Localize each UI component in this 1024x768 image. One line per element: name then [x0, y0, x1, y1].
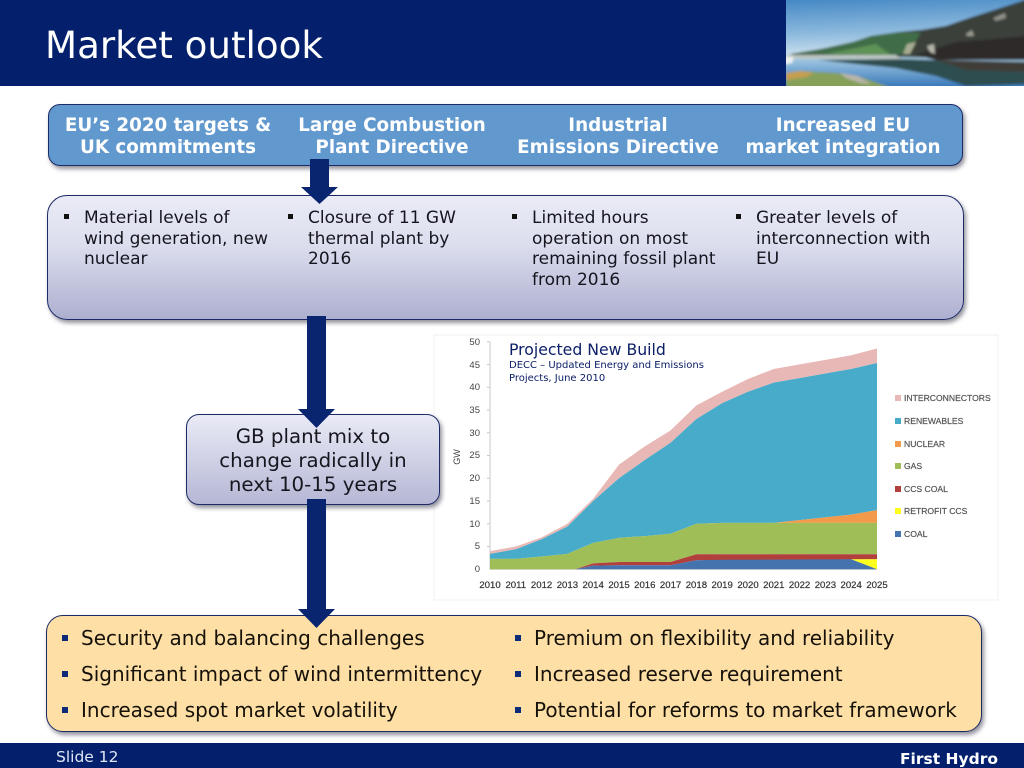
x axis labels: 2019 — [712, 580, 733, 591]
header band — [0, 0, 786, 86]
chart subtitle: DECC – Updated Energy and Emissions — [509, 360, 704, 371]
chart legend: RETROFIT CCS — [904, 506, 968, 516]
y axis labels: 45 — [469, 360, 480, 371]
chart subtitle: Projects, June 2010 — [509, 373, 605, 384]
x axis labels — [479, 580, 888, 591]
chart legend — [895, 393, 991, 539]
bullet: material levels: nuclear — [84, 249, 147, 269]
heading: Industrial Emissions Directive: Emissions Directive — [517, 137, 719, 158]
y axis title: GW — [452, 449, 462, 465]
y axis labels: 40 — [469, 382, 480, 393]
chart title: Projected New Build — [509, 340, 666, 359]
chart legend: CCS COAL — [904, 484, 948, 494]
y axis labels: 0 — [475, 564, 480, 575]
bullet: greater levels: interconnection with — [756, 228, 930, 248]
x axis labels: 2024 — [841, 580, 863, 591]
x axis labels: 2023 — [815, 580, 836, 591]
chart legend: INTERCONNECTORS — [904, 393, 991, 403]
y axis labels: 20 — [469, 473, 480, 484]
panel: GB plant mix — [186, 414, 440, 505]
bullet: material levels: Material levels of — [84, 208, 230, 228]
panel: consequences — [46, 615, 982, 732]
x axis labels: 2012 — [531, 580, 552, 591]
heading: Industrial Emissions Directive — [517, 115, 719, 158]
x axis labels: 2010 — [479, 580, 501, 591]
heading: EU 2020 targets: UK commitments — [80, 137, 256, 158]
y axis labels: 25 — [469, 450, 480, 461]
heading: Large Combustion Plant Directive: Plant Directive — [315, 137, 469, 158]
bullet: spot volatility: Increased spot market volatility — [81, 698, 398, 722]
footer band — [0, 743, 1024, 768]
bullet: limited hours: remaining fossil plant — [532, 249, 716, 269]
bullet: wind intermittency: Significant impact of wind intermittency — [81, 662, 482, 686]
bullet: reforms: Potential for reforms to market framework — [534, 698, 957, 722]
y axis labels: 30 — [469, 428, 480, 439]
panel: directives heading bar — [48, 104, 963, 166]
heading: Large Combustion Plant Directive — [298, 115, 486, 158]
x axis labels: 2016 — [634, 580, 655, 591]
panel: GB plant mix: change radically in — [219, 449, 407, 472]
title: Market outlook — [45, 23, 323, 67]
bullet: greater levels: Greater levels of — [756, 208, 897, 228]
bullet: limited hours: from 2016 — [532, 270, 620, 290]
bullet: closure — [288, 208, 456, 269]
panel: GB plant mix: GB plant mix to — [236, 425, 390, 448]
heading: EU 2020 targets — [65, 115, 271, 158]
bullet: limited hours: operation on most — [532, 228, 688, 248]
chart legend: GAS — [904, 461, 922, 471]
x axis labels: 2017 — [660, 580, 681, 591]
bullet: limited hours: Limited hours — [532, 208, 649, 228]
y axis labels: 5 — [475, 541, 480, 552]
bullet: reserve: Increased reserve requirement — [534, 662, 843, 686]
bullet: closure: 2016 — [308, 249, 351, 269]
x axis labels: 2021 — [763, 580, 784, 591]
bullet: material levels: wind generation, new — [84, 228, 268, 248]
bullet: material levels — [64, 208, 268, 269]
panel: directive impacts — [47, 195, 964, 320]
heading: Industrial Emissions Directive: Industrial — [568, 115, 668, 136]
stacked areas — [490, 348, 877, 569]
panel: GB plant mix: next 10-15 years — [229, 473, 397, 496]
x axis labels: 2018 — [686, 580, 707, 591]
y axis labels: 15 — [469, 496, 480, 507]
chart legend: NUCLEAR — [904, 439, 945, 449]
y axis labels: 50 — [469, 337, 480, 348]
bullet: greater levels: EU — [756, 249, 779, 269]
y axis labels: 35 — [469, 405, 480, 416]
bullet: closure: thermal plant by — [308, 228, 449, 248]
heading: Increased EU market integration: Increased EU — [776, 115, 910, 136]
bullet: flexibility: Premium on flexibility and reliability — [534, 626, 894, 650]
chart subtitle — [509, 360, 704, 384]
y axis labels: 10 — [469, 519, 480, 530]
heading: Increased EU market integration: market integration — [745, 137, 940, 158]
bullet: security: Security and balancing challenges — [81, 626, 425, 650]
x axis labels: 2015 — [608, 580, 630, 591]
x axis labels: 2011 — [505, 580, 526, 591]
heading: EU 2020 targets: EU’s 2020 targets & — [65, 115, 271, 136]
chart legend: RENEWABLES — [904, 416, 964, 426]
y axis labels — [469, 337, 480, 575]
plot axes — [487, 342, 877, 569]
x axis labels: 2014 — [583, 580, 605, 591]
chart legend: COAL — [904, 529, 928, 539]
x axis labels: 2020 — [737, 580, 759, 591]
x axis labels: 2013 — [557, 580, 578, 591]
x axis labels: 2025 — [866, 580, 888, 591]
x axis labels: 2022 — [789, 580, 810, 591]
brand name: First Hydro — [900, 750, 998, 768]
header photo: reservoir landscape — [786, 0, 1024, 86]
heading: Increased EU market integration — [745, 115, 940, 158]
bullet: greater levels — [736, 208, 930, 269]
slide number: Slide 12 — [56, 748, 118, 766]
heading: Large Combustion Plant Directive: Large Combustion — [298, 115, 486, 136]
bullet: limited hours — [512, 208, 716, 290]
bullet: closure: Closure of 11 GW — [308, 208, 456, 228]
